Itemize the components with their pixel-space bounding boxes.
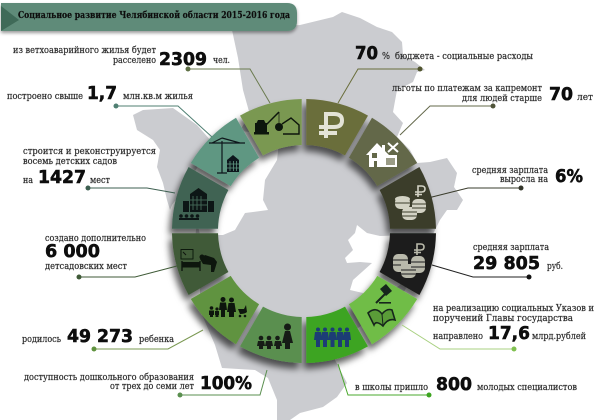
callout: young specialists <box>338 364 577 398</box>
icon: rouble <box>319 114 342 138</box>
callout: budget share: 70 <box>355 43 378 64</box>
segment: new kindergarten places <box>172 233 228 295</box>
callout: housing built: млн.кв.м жилья <box>123 92 193 102</box>
callout: resettled residents <box>13 45 270 103</box>
callout: new preschool places: 6 000 <box>45 241 100 262</box>
segment: young specialists <box>306 307 368 363</box>
callout: repair benefits: для людей старше <box>462 94 542 104</box>
icon: coins with rouble <box>395 186 426 220</box>
icon: family with stroller <box>209 297 247 317</box>
title banner <box>1 3 297 31</box>
callout: repair benefits: 70 <box>549 84 573 105</box>
callout: kindergartens: восемь детских садов <box>23 157 117 167</box>
callout: births: 49 273 <box>67 326 133 347</box>
callout: births: родилось <box>22 335 61 345</box>
callout: kindergartens: 1427 <box>38 167 86 188</box>
callout: resettled residents: расселено <box>113 56 156 66</box>
segment: average salary <box>380 233 436 295</box>
callout: budget share: бюджета - социальные расходы <box>395 51 533 62</box>
callout: births <box>22 326 203 352</box>
callout: housing built: построено свыше <box>7 92 83 102</box>
title banner: Социальное развитие Челябинской области 2015-2016 года <box>18 10 290 21</box>
callout: housing built <box>7 83 212 137</box>
segment: housing built <box>191 118 259 186</box>
icon: excavator and house <box>254 112 299 134</box>
callout: housing built: 1,7 <box>87 83 117 104</box>
callout: salary growth: средняя зарплата <box>472 166 549 176</box>
icon: coins with rouble <box>393 244 425 278</box>
segment: births <box>191 276 259 344</box>
callout: resettled residents: из ветхоаварийного жилья будет <box>13 45 156 56</box>
segment: budget <box>306 99 368 155</box>
icon: house and tools <box>366 143 398 167</box>
callout: repair benefits <box>392 84 593 135</box>
callout: preschool access <box>24 370 267 398</box>
callout: new preschool places <box>45 234 177 280</box>
callout: salary growth <box>428 166 583 198</box>
callout: births: ребенка <box>139 334 175 345</box>
callout: preschool access: 100% <box>200 373 252 394</box>
callout: preschool access: от трех до семи лет <box>110 382 194 392</box>
callout: young specialists: в школы пришло <box>355 383 428 393</box>
callout: resettled residents: 2309 <box>159 49 207 70</box>
callout: average salary: руб. <box>547 261 563 272</box>
callout: repair benefits: лет <box>577 93 593 103</box>
callout: social decrees funding: поручений Главы государства <box>433 314 574 324</box>
callout: kindergartens <box>23 147 175 193</box>
ring of twelve segments <box>172 99 436 363</box>
icon: teacher at a bed <box>181 250 217 272</box>
callout: average salary: 29 805 <box>473 253 540 274</box>
callout: salary growth: 6% <box>555 166 583 187</box>
icon: five people <box>314 328 351 347</box>
callout: resettled residents: чел. <box>213 56 230 66</box>
callout: social decrees funding: 17,6 <box>488 323 530 344</box>
segment: resettlement from old housing <box>240 99 302 155</box>
callout: kindergartens: строится и реконструируется <box>23 147 156 157</box>
callout: budget share <box>338 43 533 103</box>
callout: budget share: % <box>382 52 390 62</box>
callout: social decrees funding: млрд.рублей <box>532 331 586 342</box>
callout: social decrees funding: направлено <box>433 332 483 342</box>
segment: salary growth <box>380 167 436 229</box>
icon: tower crane and building <box>209 138 245 173</box>
callout: young specialists: молодых специалистов <box>477 383 577 393</box>
segment: kindergartens under construction <box>172 167 228 229</box>
callout: salary growth: выросла на <box>500 175 549 185</box>
callout: kindergartens: на <box>23 176 34 186</box>
icon: gavel and book <box>368 284 395 326</box>
map of the region <box>133 12 463 420</box>
icon: kindergarten building <box>179 188 214 220</box>
callout: preschool access: доступность дошкольного образования <box>24 372 194 383</box>
callout: kindergartens: мест <box>90 176 110 186</box>
callout: young specialists: 800 <box>436 374 472 395</box>
callout: average salary <box>432 243 563 280</box>
callout: new preschool places: детсадовских мест <box>45 262 127 272</box>
segment: preschool access <box>240 307 302 363</box>
segment: housing repair <box>349 118 417 186</box>
callout: average salary: средняя зарплата <box>473 243 550 253</box>
callout: social decrees funding <box>402 304 594 352</box>
callout: new preschool places: создано дополнительно <box>45 234 146 244</box>
icon: mother and children <box>257 324 293 349</box>
callout: repair benefits: льготы по платежам за капремонт <box>392 84 542 94</box>
segment: social decrees <box>349 276 417 344</box>
